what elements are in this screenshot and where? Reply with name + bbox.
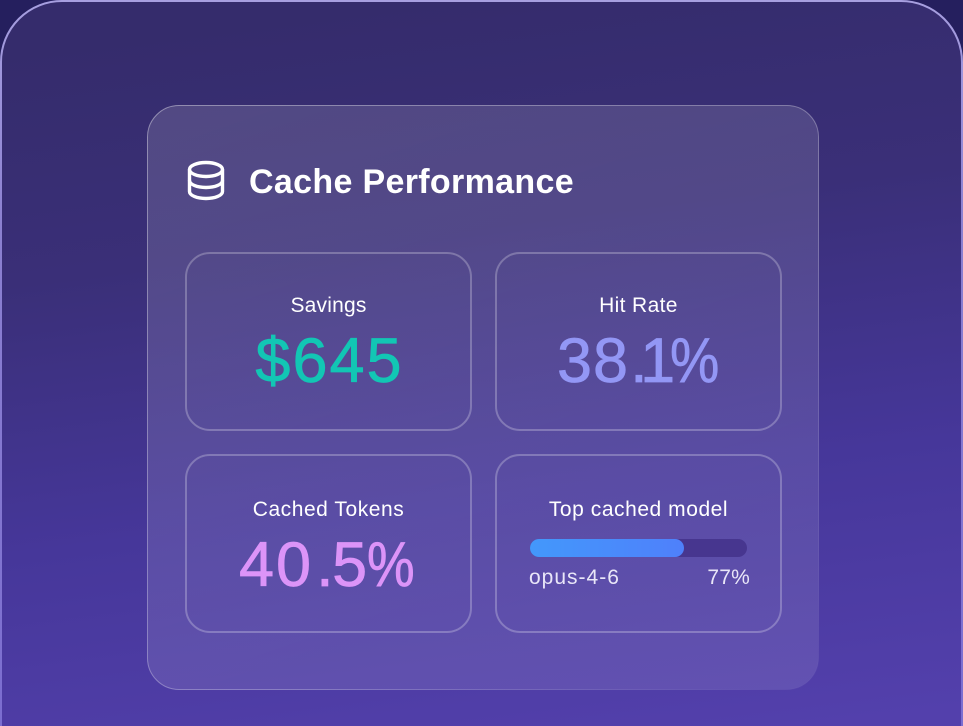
model share: 77% bbox=[707, 566, 750, 589]
stat card: hit rate bbox=[495, 252, 782, 431]
value: hit rate: 38.1 bbox=[557, 326, 670, 396]
heading: Cache Performance bbox=[249, 163, 574, 201]
icon: database bbox=[188, 160, 224, 200]
label: hit rate: Hit Rate bbox=[599, 294, 678, 317]
stat card: top cached model bbox=[495, 454, 782, 633]
label: top cached model: Top cached model bbox=[549, 498, 728, 521]
value: cached tokens: % bbox=[367, 530, 415, 600]
stat card: savings bbox=[185, 252, 472, 431]
progress bar bbox=[530, 539, 747, 557]
label: cached tokens: Cached Tokens bbox=[253, 498, 404, 521]
value: cached tokens: 40.5 bbox=[239, 530, 367, 600]
progress fill bbox=[530, 539, 684, 557]
value: hit rate bbox=[557, 326, 719, 396]
model name: opus-4-6 bbox=[529, 566, 620, 589]
label: savings: Savings bbox=[290, 294, 367, 317]
value: savings: $645 bbox=[255, 326, 404, 396]
value: hit rate: % bbox=[670, 326, 719, 396]
panel: cache performance bbox=[147, 105, 819, 690]
stat card: cached tokens bbox=[185, 454, 472, 633]
